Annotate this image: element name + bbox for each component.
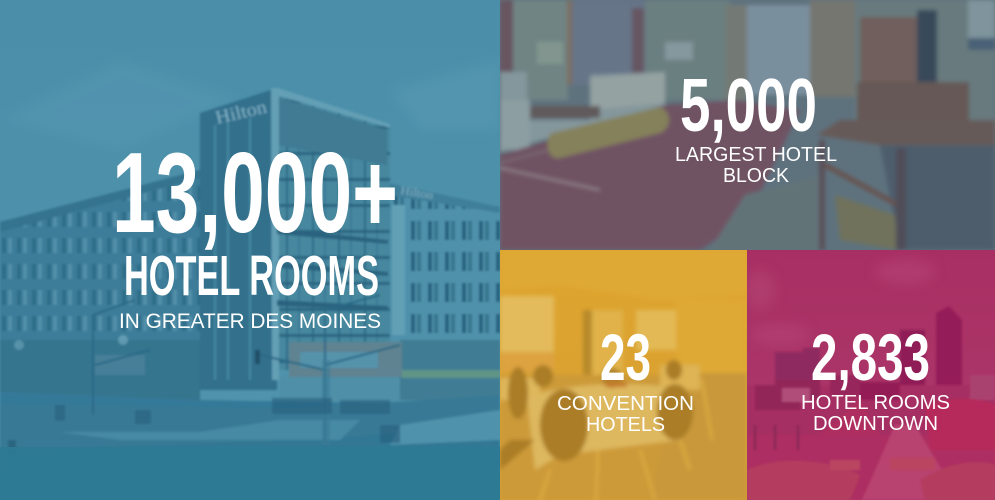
- ground: [1, 392, 500, 447]
- label: hotel rooms downtown: [801, 391, 950, 435]
- label: in Greater Des Moines: IN GREATER DES MOINES: [119, 309, 381, 333]
- label: hotel rooms: HOTEL ROOMS: [124, 244, 379, 308]
- hotel signs: Hilton: [213, 97, 269, 129]
- panel: largest hotel block: [500, 0, 995, 250]
- label: largest hotel block: [675, 143, 837, 187]
- crowd: [55, 398, 400, 443]
- label: convention hotels: [557, 392, 694, 436]
- panel: convention hotels: [500, 250, 747, 500]
- left wing: [0, 178, 201, 340]
- street poles: [92, 294, 400, 414]
- label: convention hotels: HOTELS: [586, 413, 665, 436]
- tower: [200, 88, 277, 390]
- podium: [289, 342, 402, 377]
- panel: hotel rooms downtown: [745, 250, 995, 500]
- photo: Hilton hotel with teal overlay: [0, 0, 500, 500]
- label: convention hotels: CONVENTION: [557, 392, 694, 415]
- label: largest hotel block: BLOCK: [723, 164, 789, 187]
- label: hotel rooms downtown: HOTEL ROOMS: [801, 391, 950, 414]
- stat: 5,000: 5,000: [680, 63, 817, 147]
- stat: 23: 23: [600, 320, 651, 394]
- right wing: [393, 196, 500, 334]
- photo: conference room with gold overlay: [500, 250, 747, 500]
- stat: 2,833: 2,833: [811, 320, 930, 394]
- panel: greater Des Moines hotel rooms: [0, 0, 500, 500]
- photo: hotel bedroom with slate overlay: [500, 0, 995, 250]
- label: hotel rooms downtown: DOWNTOWN: [813, 412, 938, 435]
- label: largest hotel block: LARGEST HOTEL: [675, 143, 837, 166]
- photo: Hilton hotel with teal overlay: Hilton: [400, 183, 434, 202]
- stat: 13,000+: 13,000+: [112, 130, 398, 257]
- photo: Des Moines skyline with magenta overlay: [745, 250, 995, 500]
